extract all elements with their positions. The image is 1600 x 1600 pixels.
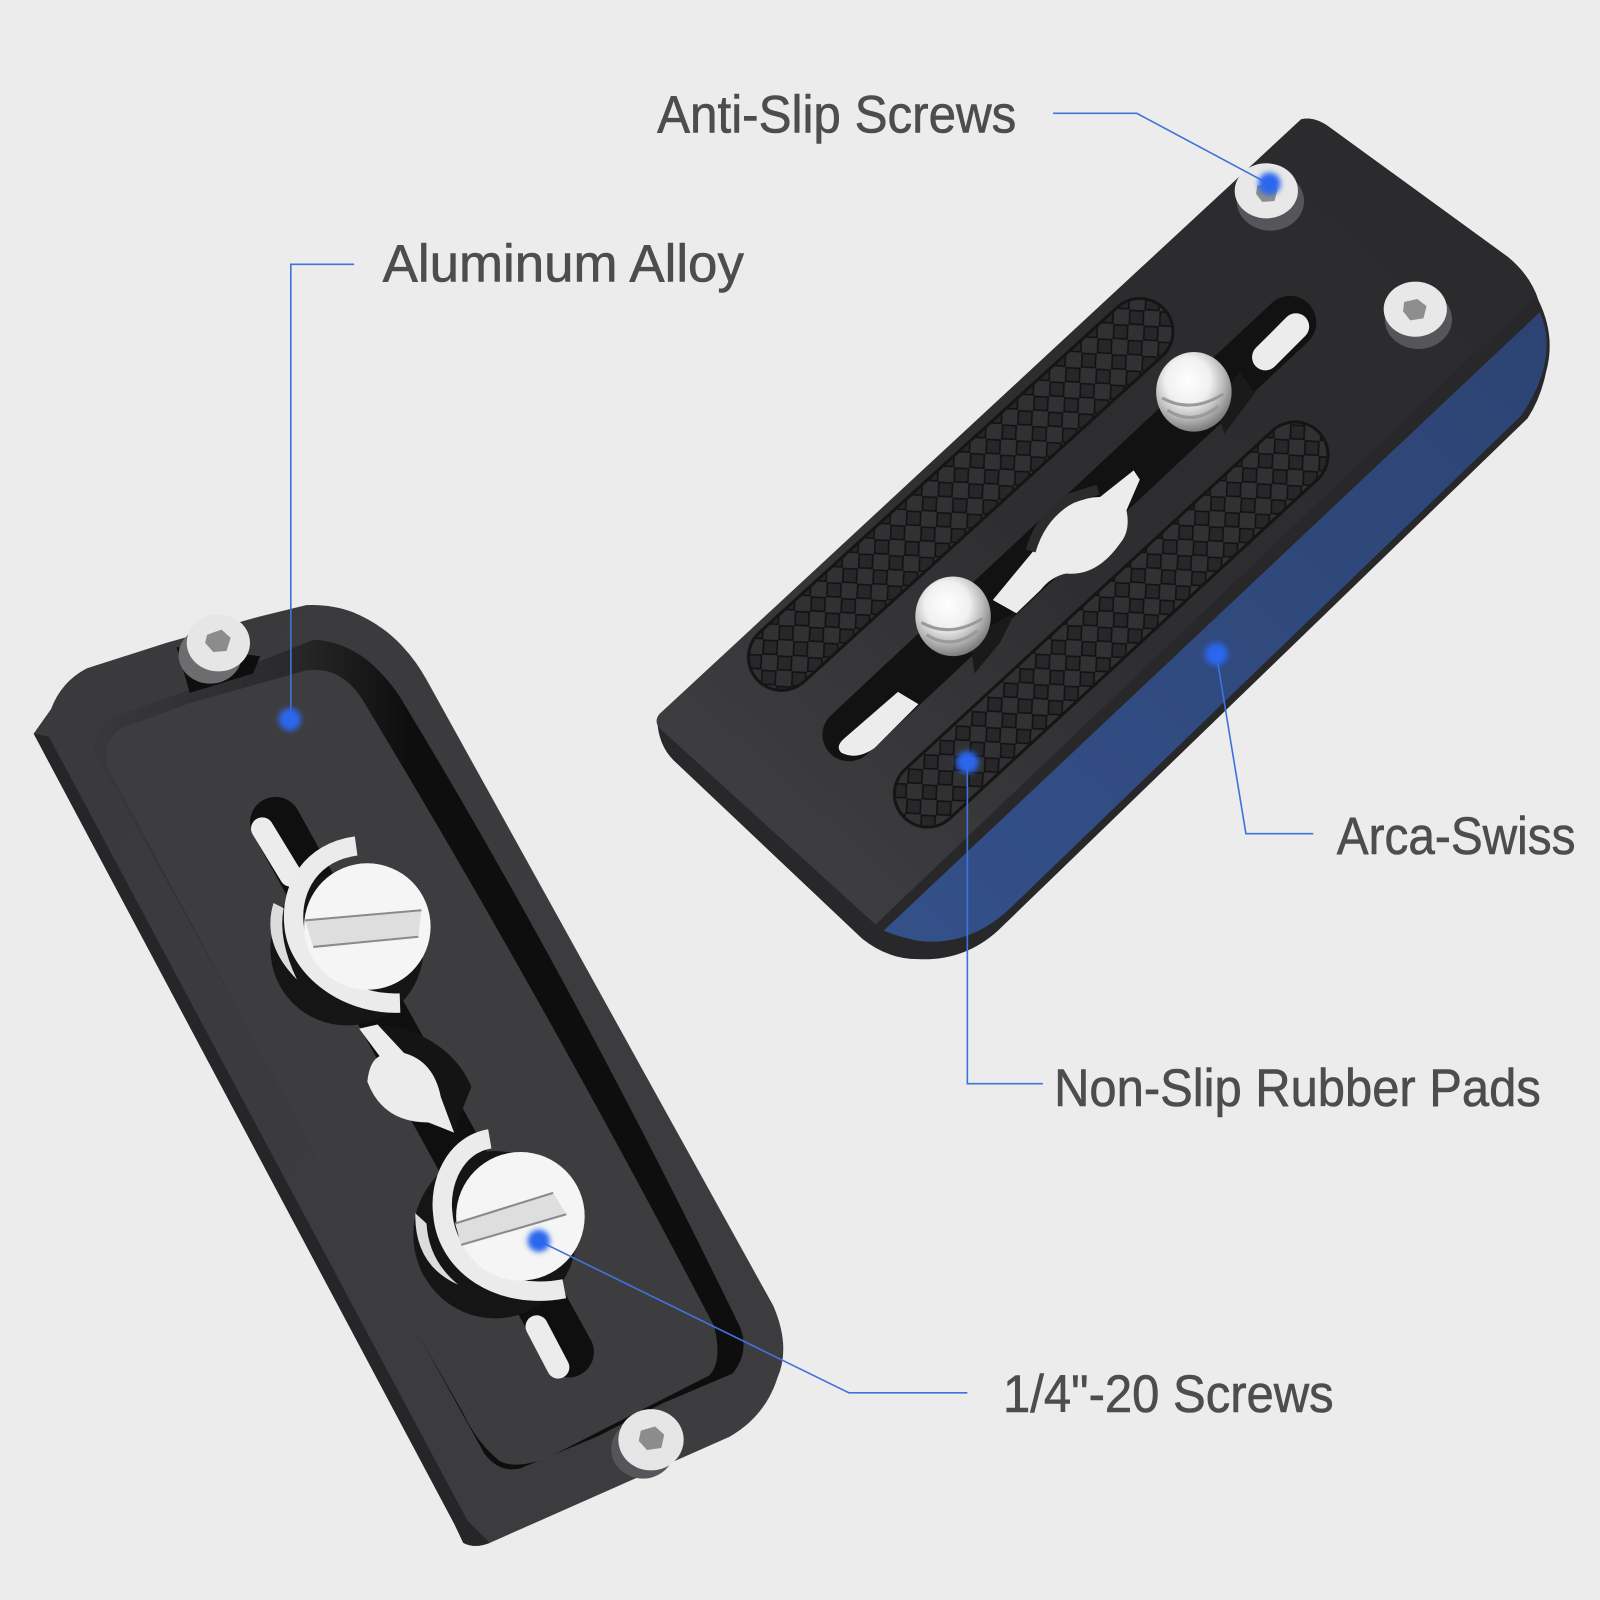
rubber pad: lower: [928, 455, 1295, 794]
marker dot: [279, 708, 301, 731]
small screw: anti-slip right: [1384, 282, 1452, 349]
rim recess wall: [94, 640, 744, 1469]
label: Arca-Swiss: [1337, 807, 1576, 866]
threaded bolt: upper: [1156, 352, 1255, 434]
label: Aluminum Alloy: [383, 235, 744, 294]
slot: [839, 322, 1296, 756]
small screw: top: [177, 614, 260, 693]
small screw: bottom: [611, 1409, 684, 1479]
small screw: anti-slip top: [1235, 163, 1304, 231]
marker dot: [1258, 172, 1281, 195]
leader line: [1053, 113, 1268, 184]
plate outer body: [34, 605, 783, 1546]
callout: 1/4"-20 Screws: [528, 1230, 1334, 1424]
threaded bolt: lower: [915, 577, 1015, 673]
plate body underside: [657, 119, 1550, 959]
panel: right plate, top view: [657, 119, 1550, 959]
label: 1/4"-20 Screws: [1003, 1365, 1334, 1424]
leader line: [1216, 654, 1313, 834]
rubber pad: upper: [782, 332, 1140, 657]
lower-left bevel: [34, 734, 490, 1546]
recess floor: [106, 670, 717, 1465]
callout: Non-Slip Rubber Pads: [956, 751, 1541, 1118]
label: Anti-Slip Screws: [657, 86, 1016, 145]
label: Non-Slip Rubber Pads: [1054, 1059, 1541, 1118]
marker dot: [956, 751, 979, 773]
leader line: [539, 1241, 967, 1393]
callout: Anti-Slip Screws: [657, 86, 1281, 195]
slot: [262, 822, 568, 1367]
blue Arca-Swiss edge: [884, 312, 1547, 942]
panel: left plate, recessed underside: [34, 605, 783, 1546]
callout: Arca-Swiss: [1205, 643, 1576, 866]
marker dot: [1205, 643, 1228, 665]
screw: lower 1/4-20: [413, 1139, 585, 1318]
screw: upper 1/4-20: [270, 846, 431, 1026]
leader line: [967, 762, 1043, 1084]
center holes: [359, 1024, 471, 1135]
marker dot: [528, 1230, 550, 1252]
leader line: [291, 264, 354, 719]
top face: [657, 119, 1536, 924]
callout: Aluminum Alloy: [279, 235, 744, 731]
